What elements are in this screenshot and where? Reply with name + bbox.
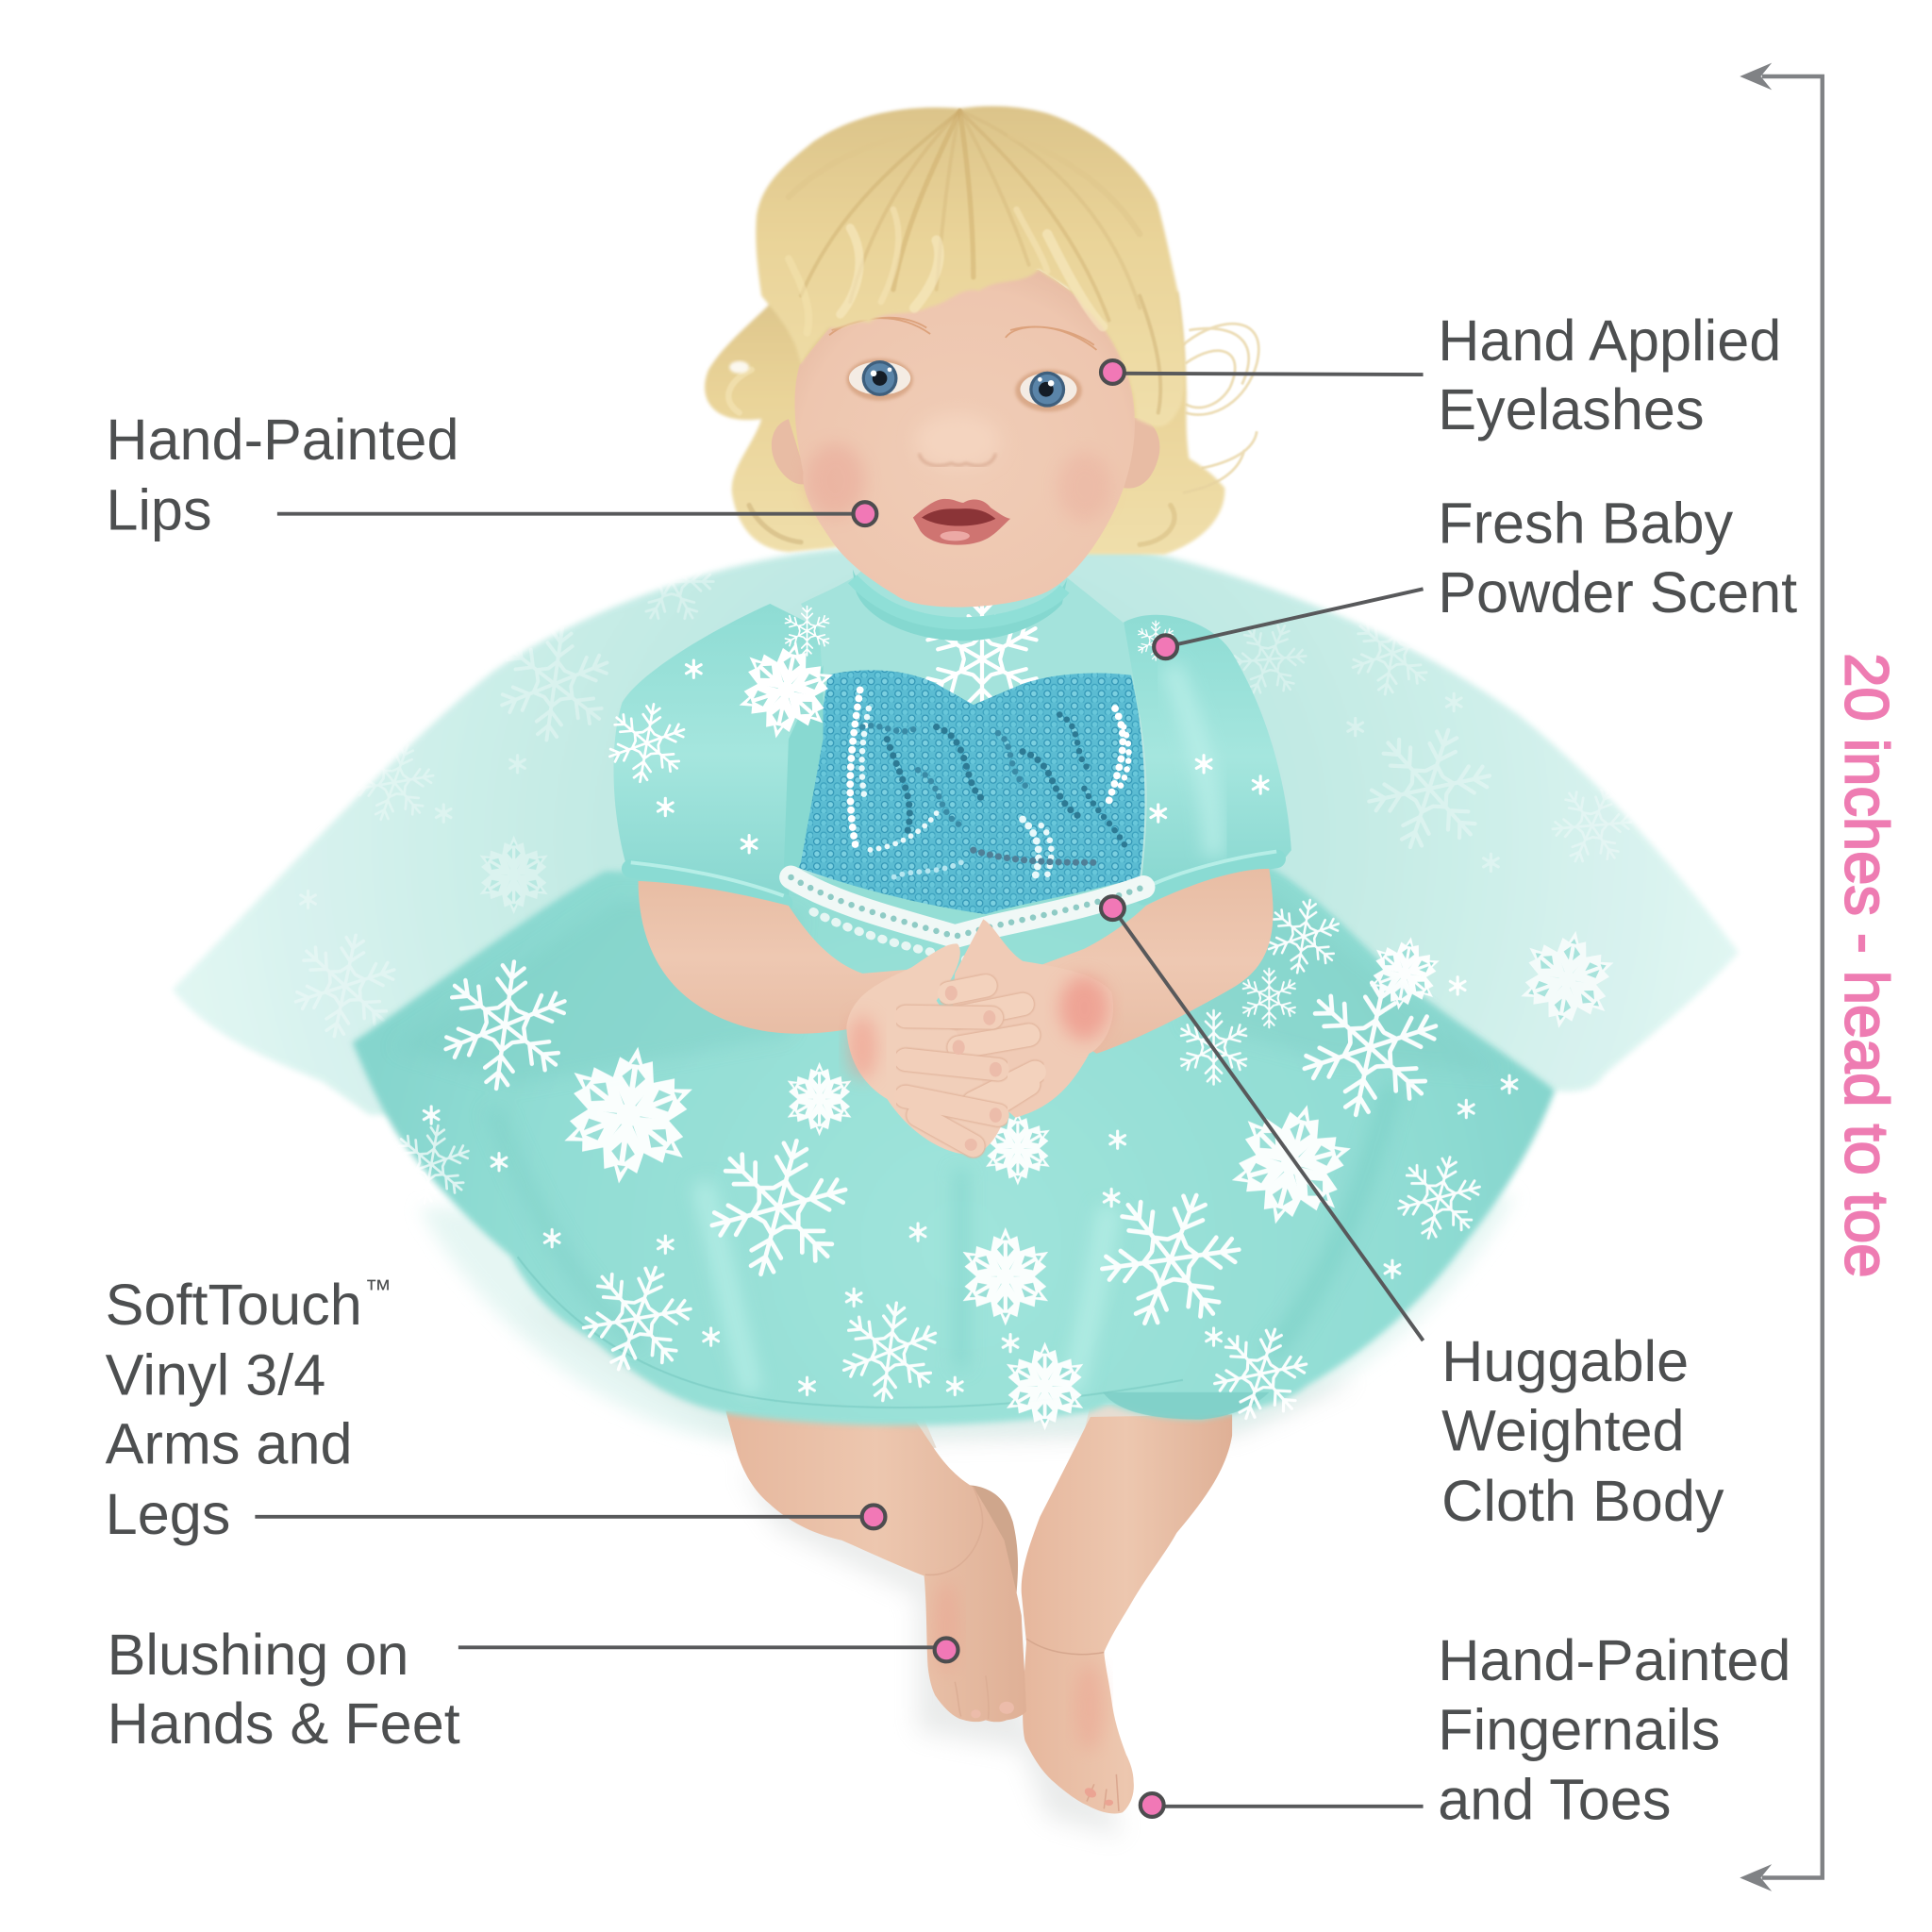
hand back right (949, 919, 1113, 1118)
height label: 20 inches - head to toe (1833, 653, 1902, 1277)
tulle halo under skirt (419, 1195, 1516, 1440)
arms and hands (639, 869, 1274, 1155)
skirt shading folds (394, 887, 1503, 1392)
callout: Huggable Weighted Cloth Body: Huggable (1441, 1329, 1689, 1393)
arrow: bottom (1740, 1864, 1772, 1891)
veil cape (173, 525, 1739, 1115)
chest snowflake (922, 597, 1042, 721)
doll illustration (173, 106, 1739, 1836)
callout: SoftTouch Vinyl arms and legs: SoftTouch (106, 1273, 362, 1337)
tulle underskirt strip (725, 1405, 937, 1452)
skirt snowflakes (387, 893, 1517, 1432)
callout: Blushing on Hands & Feet (108, 1623, 958, 1756)
dress bodice (602, 569, 1291, 914)
callout: Hand-Painted Fingernails and Toes: and Toes (1438, 1767, 1671, 1831)
hair front (728, 106, 1185, 544)
callout: SoftTouch Vinyl arms and legs: Legs (106, 1482, 230, 1546)
callout: Fresh Baby Powder Scent (1154, 491, 1797, 658)
white gap in left curl (729, 361, 749, 374)
lace waistband (791, 877, 1143, 961)
callout: Hand Applied Eyelashes: Eyelashes (1438, 377, 1705, 441)
fingernails (945, 986, 1002, 1151)
right eye (1015, 370, 1082, 411)
right leg (1022, 1414, 1232, 1813)
legs (725, 1405, 1232, 1813)
callout: Hand-Painted Lips: Lips (106, 478, 212, 542)
callout: Fresh Baby Powder Scent: Powder Scent (1438, 560, 1797, 625)
right arm (986, 869, 1274, 1054)
callout: Huggable Weighted Cloth Body (1101, 896, 1724, 1533)
nose (915, 414, 999, 468)
sequin panel (794, 670, 1144, 914)
arrow: top (1740, 63, 1772, 90)
callout: Huggable Weighted Cloth Body: Cloth Body (1441, 1469, 1724, 1533)
loose curl wisps (1183, 324, 1258, 492)
callout: Hand-Painted Lips: Hand-Painted (106, 408, 459, 472)
callout: Hand-Painted Lips (106, 408, 876, 542)
chest net panel (801, 569, 1146, 740)
callout: Huggable Weighted Cloth Body: Weighted (1441, 1398, 1685, 1462)
eyebrows (829, 318, 930, 335)
left sleeve (613, 604, 823, 906)
skirt hem (518, 1257, 1183, 1407)
hand left (846, 943, 1001, 1155)
callout: SoftTouch Vinyl arms and legs (106, 1273, 885, 1546)
callout: Hand-Painted Fingernails and Toes: Hand-Painted (1438, 1628, 1790, 1692)
face (794, 269, 1135, 608)
right sleeve (1124, 615, 1291, 899)
left leg (725, 1411, 1026, 1722)
callout: Hand-Painted Fingernails and Toes (1141, 1628, 1790, 1831)
mouth (913, 499, 1010, 545)
callout: SoftTouch Vinyl arms and legs: Vinyl 3/4 (106, 1343, 325, 1407)
callout: Blushing on Hands & Feet: Hands & Feet (108, 1691, 460, 1756)
callout: Hand Applied Eyelashes: Hand Applied (1438, 308, 1781, 373)
hair strands (728, 111, 1174, 544)
skirt (353, 862, 1555, 1432)
left leg back heel (961, 1485, 1018, 1602)
fingers (906, 986, 1035, 1146)
hair back layer (705, 283, 1224, 555)
soft drop shadows (518, 1306, 1356, 1836)
blush on hands (848, 1015, 877, 1079)
callout: SoftTouch Vinyl arms and legs: ™ (365, 1275, 391, 1306)
callout: Hand-Painted Fingernails and Toes: Fingernails (1438, 1698, 1721, 1762)
veil snowflakes (285, 525, 1643, 1047)
sequin sparkles (850, 690, 1129, 877)
callout: SoftTouch Vinyl arms and legs: Arms and (106, 1412, 353, 1476)
left eye (846, 358, 913, 400)
cheeks (806, 443, 865, 518)
callout: Fresh Baby Powder Scent: Fresh Baby (1438, 491, 1734, 555)
ears (772, 418, 1159, 489)
left arm (639, 881, 937, 1034)
callout: Hand Applied Eyelashes (1101, 308, 1781, 441)
callout: Blushing on Hands & Feet: Blushing on (108, 1623, 408, 1687)
collar (853, 569, 1067, 641)
height bracket with arrows (1740, 63, 1823, 1891)
